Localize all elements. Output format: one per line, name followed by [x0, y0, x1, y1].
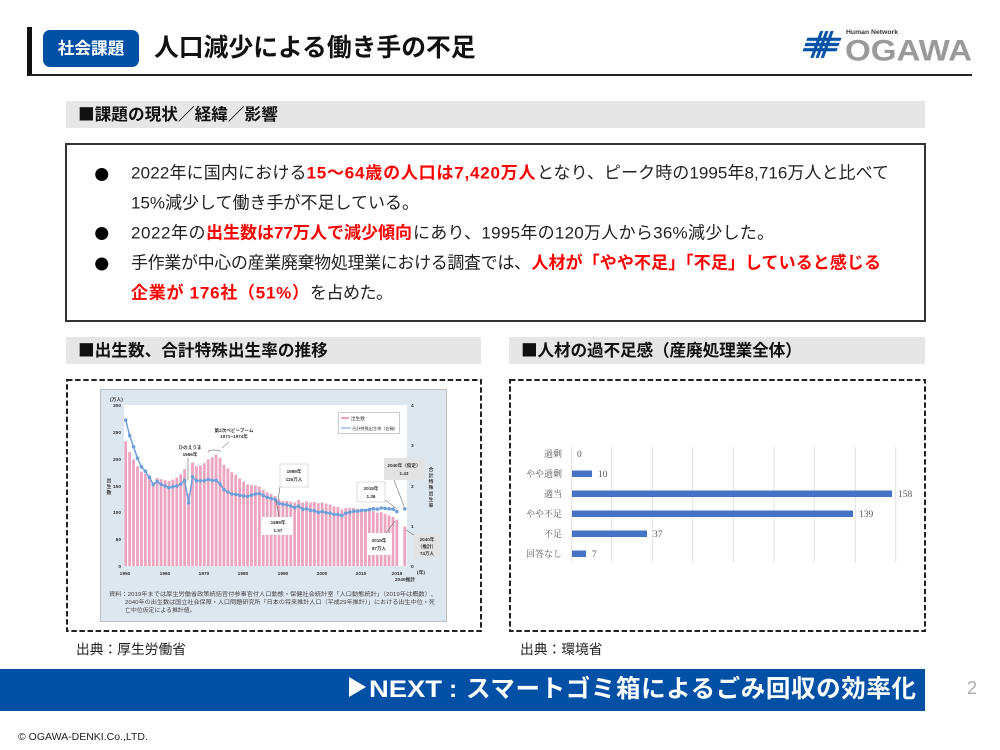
title: 人口減少による働き手の不足 — [154, 35, 476, 62]
chart: births and fertility rate: 1.57 — [274, 528, 283, 533]
chart: births and fertility rate: 出生数 — [351, 415, 365, 422]
logo: Human Network — [846, 29, 899, 36]
section heading: labour shortage: ■人材の過不足感（産廃処理業全体） — [521, 337, 802, 361]
chart: births and fertility rate: 生 — [429, 496, 434, 503]
section heading: current status: ■課題の現状／経緯／影響 — [78, 101, 278, 125]
logo — [802, 29, 972, 65]
chart: births and fertility rate: 1970 — [199, 571, 210, 577]
chart: births and fertility rate: 生 — [107, 483, 112, 490]
chart: births and fertility rate: (万人) — [110, 397, 123, 403]
chart: labour shortage bars: 過剰 — [544, 448, 562, 459]
chart: births and fertility rate: 4 — [411, 403, 414, 409]
chart: births and fertility rate: 殊 — [429, 485, 434, 491]
source: births: 出典：厚生労働省 — [76, 642, 186, 657]
chart: births and fertility rate: 1990 — [278, 571, 289, 577]
chart: labour shortage bars: 回答なし — [526, 548, 562, 559]
chart: births and fertility rate: 0 — [118, 564, 121, 570]
chart: births and fertility rate: 特 — [429, 478, 434, 485]
source: shortage: 出典：環境省 — [520, 642, 603, 657]
chart: births and fertility rate: 2019年 — [372, 537, 387, 544]
chart: births and fertility rate: 1.43 — [400, 471, 409, 476]
section heading: current status — [66, 101, 925, 128]
panel: shortage chart frame — [509, 379, 926, 632]
chart: births and fertility rate: 1950 — [120, 571, 131, 577]
bullet text block: 2022年の — [131, 224, 206, 242]
chart: labour shortage bars: 139 — [859, 510, 874, 520]
chart: births and fertility rate: 亡中位仮定による推計値。 — [125, 606, 196, 614]
bullet text block: 人材が「やや不足」「不足」していると感じる — [532, 252, 881, 272]
chart: births and fertility rate: 2000 — [317, 571, 328, 577]
next banner: : — [449, 676, 457, 703]
chart: births and fertility rate: 1989年 — [287, 468, 302, 475]
chart: labour shortage bars: 0 — [577, 450, 582, 460]
chart: births and fertility rate — [100, 389, 447, 622]
chart: labour shortage bars — [526, 447, 912, 563]
bullet text block — [94, 164, 889, 302]
chart: births and fertility rate: 2010 — [356, 571, 367, 577]
section heading: births — [66, 337, 481, 364]
bullet text block: 15～64歳の人口は7,420万人 — [306, 164, 536, 182]
chart: births and fertility rate: 計 — [429, 472, 434, 479]
chart: births and fertility rate: 0 — [411, 564, 414, 570]
chart: labour shortage bars: 適当 — [544, 488, 562, 499]
chart: births and fertility rate: 第2次ベビーブーム — [215, 427, 254, 434]
next banner: スマートゴミ箱によるごみ回収の効率化 — [466, 674, 916, 703]
chart: births and fertility rate: (年) — [417, 569, 425, 576]
next banner: NEXT — [369, 676, 442, 703]
bullet text block: ● — [94, 164, 109, 185]
chart: births and fertility rate: 1960 — [160, 571, 171, 577]
chart: births and fertility rate: 合 — [429, 466, 434, 473]
chart: births and fertility rate: 74万人 — [420, 551, 435, 557]
chart: births and fertility rate: ひのえうま — [179, 444, 202, 451]
chart: births and fertility rate: 1989年 — [271, 519, 286, 526]
chart: births and fertility rate: （推計） — [418, 543, 436, 550]
panel: current status text — [65, 143, 926, 322]
bullet text block: 出生数は77万人で減少傾向 — [206, 224, 412, 242]
chart: births and fertility rate: 2040年の出生数は国立社会保障・人口問題研究所「日本の将来推計人口（平成29年推計）」における出生中位・死 — [125, 598, 435, 606]
chart: births and fertility rate: 率 — [429, 502, 434, 509]
bullet text block: 2022年に国内における — [131, 164, 306, 182]
section heading: labour shortage — [509, 337, 925, 364]
chart: births and fertility rate: 250 — [113, 430, 121, 436]
chart: births and fertility rate: 資料：2019年までは厚生労働省政策統括官付参事官付人口動態・保健社会統計室「人口動態統計」（2019年は概数）、 — [109, 590, 437, 598]
chart: births and fertility rate: 1 — [411, 524, 414, 530]
chart: births and fertility rate: 2040年（仮定） — [387, 462, 421, 469]
bullet text block: 手作業が中心の産業廃棄物処理業における調査では、 — [131, 254, 531, 272]
chart: births and fertility rate: 1980 — [238, 571, 249, 577]
category badge — [43, 30, 139, 67]
chart: births and fertility rate: 2 — [411, 484, 414, 490]
chart: births and fertility rate: 125万人 — [286, 477, 303, 483]
chart: births and fertility rate: 出 — [107, 477, 112, 484]
bullet text block: 企業が 176社（51%） — [131, 282, 309, 302]
chart: births and fertility rate: 100 — [113, 510, 121, 516]
chart: births and fertility rate: 150 — [113, 484, 121, 490]
chart: births and fertility rate: 1966年 — [183, 451, 198, 458]
next banner — [0, 669, 925, 711]
chart: births and fertility rate: 50 — [116, 537, 121, 543]
bullet text block: 15%減少して働き手が不足している。 — [131, 194, 419, 212]
chart: births and fertility rate: 2040年 — [420, 536, 435, 543]
bullet text block: となり、ピーク時の1995年8,716万人と比べて — [537, 164, 889, 182]
chart: labour shortage bars: 158 — [898, 490, 912, 500]
chart: births and fertility rate: 200 — [113, 457, 121, 463]
chart: births and fertility rate: 1.36 — [367, 494, 376, 499]
chart: births and fertility rate: 2040推計 — [395, 576, 415, 583]
chart: births and fertility rate: 300 — [113, 403, 121, 409]
bullet text block: ● — [94, 223, 109, 244]
chart: labour shortage bars: 不足 — [544, 529, 562, 539]
chart: labour shortage bars: 7 — [592, 550, 597, 560]
chart: labour shortage bars: やや不足 — [526, 509, 562, 519]
chart: births and fertility rate: 87万人 — [372, 546, 387, 552]
copyright: © OGAWA-DENKI.Co.,LTD. — [18, 731, 148, 743]
page number: 2 — [967, 678, 977, 698]
chart: births and fertility rate: 1971~1974年 — [220, 433, 248, 440]
chart: births and fertility rate: 2019年 — [364, 485, 379, 492]
bullet text block: を占めた。 — [310, 284, 393, 302]
chart: labour shortage bars: 37 — [653, 530, 663, 540]
bullet text block: にあり、1995年の120万人から36%減少した。 — [413, 224, 774, 242]
chart: labour shortage bars: やや過剰 — [526, 468, 562, 479]
chart: births and fertility rate: 合計特殊出生率（右軸） — [352, 425, 398, 432]
panel: births chart frame — [66, 379, 482, 632]
chart: births and fertility rate: 数 — [107, 489, 112, 496]
section heading: births: ■出生数、合計特殊出生率の推移 — [78, 337, 328, 361]
bullet text block: ● — [94, 254, 109, 274]
chart: births and fertility rate: 出 — [429, 490, 434, 497]
chart: labour shortage bars: 10 — [598, 470, 608, 480]
header rule — [27, 27, 972, 76]
category badge: 社会課題 — [58, 39, 124, 58]
chart: births and fertility rate: 3 — [411, 443, 414, 449]
chart: births and fertility rate: 2019 — [392, 571, 403, 577]
